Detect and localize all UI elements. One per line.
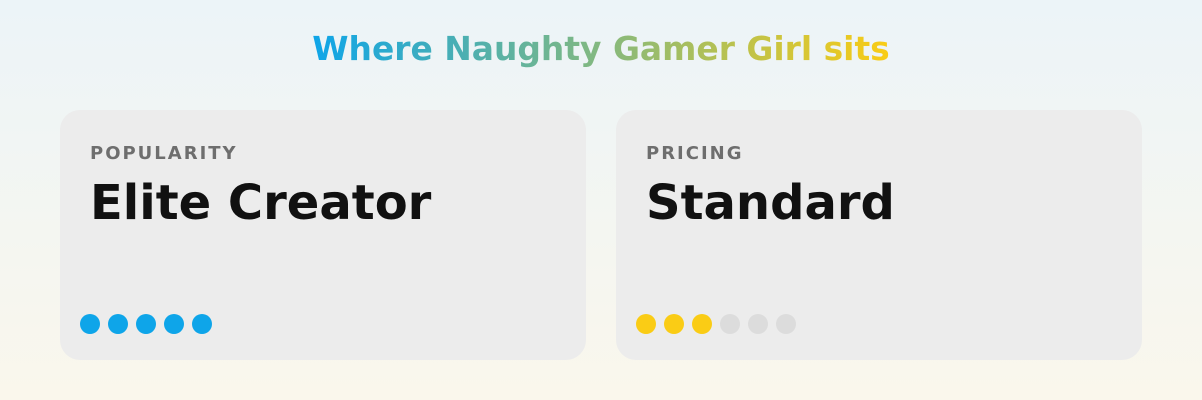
popularity value: Elite Creator [90,175,431,231]
popularity label: POPULARITY [90,143,238,164]
pricing value: Standard [646,175,895,231]
title: Where Naughty Gamer Girl sits [312,29,890,68]
panel: pricing [616,110,1142,360]
popularity rating dots [80,314,212,334]
pricing label: PRICING [646,143,744,164]
panel: popularity [60,110,586,360]
pricing rating dots [636,314,796,334]
